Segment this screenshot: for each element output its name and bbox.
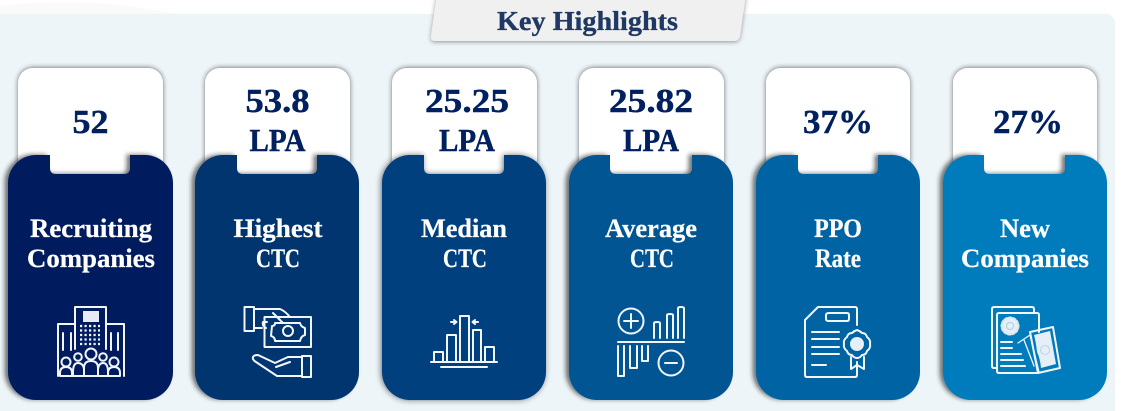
value box: 52: 52 [72, 104, 108, 141]
card: New Companies [943, 68, 1107, 400]
card body [195, 155, 359, 400]
card: PPO Rate [756, 68, 920, 400]
label [961, 214, 1089, 273]
value box: 25.82 LPA [579, 68, 724, 174]
value box: 53.8 LPA: LPA [250, 122, 306, 158]
label: CTC [256, 245, 300, 274]
label: New [1000, 214, 1050, 243]
value box: 37%: 37% [803, 104, 873, 141]
label [234, 214, 323, 274]
value box: 27% [953, 68, 1097, 174]
label: Median [421, 214, 508, 243]
card: Median CTC [382, 68, 546, 400]
label [814, 215, 862, 273]
label: Rate [815, 245, 861, 273]
icon: office building and people [58, 307, 124, 376]
value box: 25.25 LPA: LPA [439, 122, 495, 158]
value box: 27%: 27% [993, 104, 1063, 141]
card body [756, 155, 920, 400]
value box: 37% [766, 68, 910, 174]
label [421, 214, 508, 274]
label: Highest [234, 214, 323, 243]
card body [943, 155, 1107, 400]
label: CTC [443, 245, 487, 274]
icon: documents and banknotes [992, 307, 1060, 373]
value box: 53.8 LPA: 53.8 [246, 83, 310, 120]
card: Average CTC [569, 68, 733, 400]
card: Recruiting Companies [8, 68, 173, 400]
card body [569, 155, 733, 400]
label: Recruiting [30, 214, 152, 243]
icon: certificate document with seal [805, 307, 870, 377]
label: Companies [961, 244, 1089, 273]
value box: 25.25 LPA: 25.25 [425, 83, 509, 120]
heading tab: Key Highlights: Key Highlights [497, 6, 678, 36]
heading tab: Key Highlights [431, 0, 746, 41]
label: PPO [814, 215, 862, 243]
value box: 25.25 LPA [392, 68, 537, 174]
icon: plus and minus bars [618, 307, 684, 376]
label [27, 214, 155, 273]
card body [382, 155, 546, 400]
value box: 25.82 LPA: LPA [623, 122, 679, 158]
label: Average [605, 214, 697, 243]
label: Companies [27, 244, 155, 273]
label [605, 214, 697, 274]
icon: hand giving money [244, 307, 311, 377]
card: Highest CTC [195, 68, 359, 400]
icon: bar chart with median arrows [431, 316, 497, 367]
label: CTC [630, 245, 674, 274]
background swoosh [0, 2, 178, 14]
value box: 53.8 LPA [205, 68, 350, 174]
value box: 52 [18, 68, 163, 174]
value box: 25.82 LPA: 25.82 [609, 83, 693, 120]
card body [8, 155, 173, 400]
